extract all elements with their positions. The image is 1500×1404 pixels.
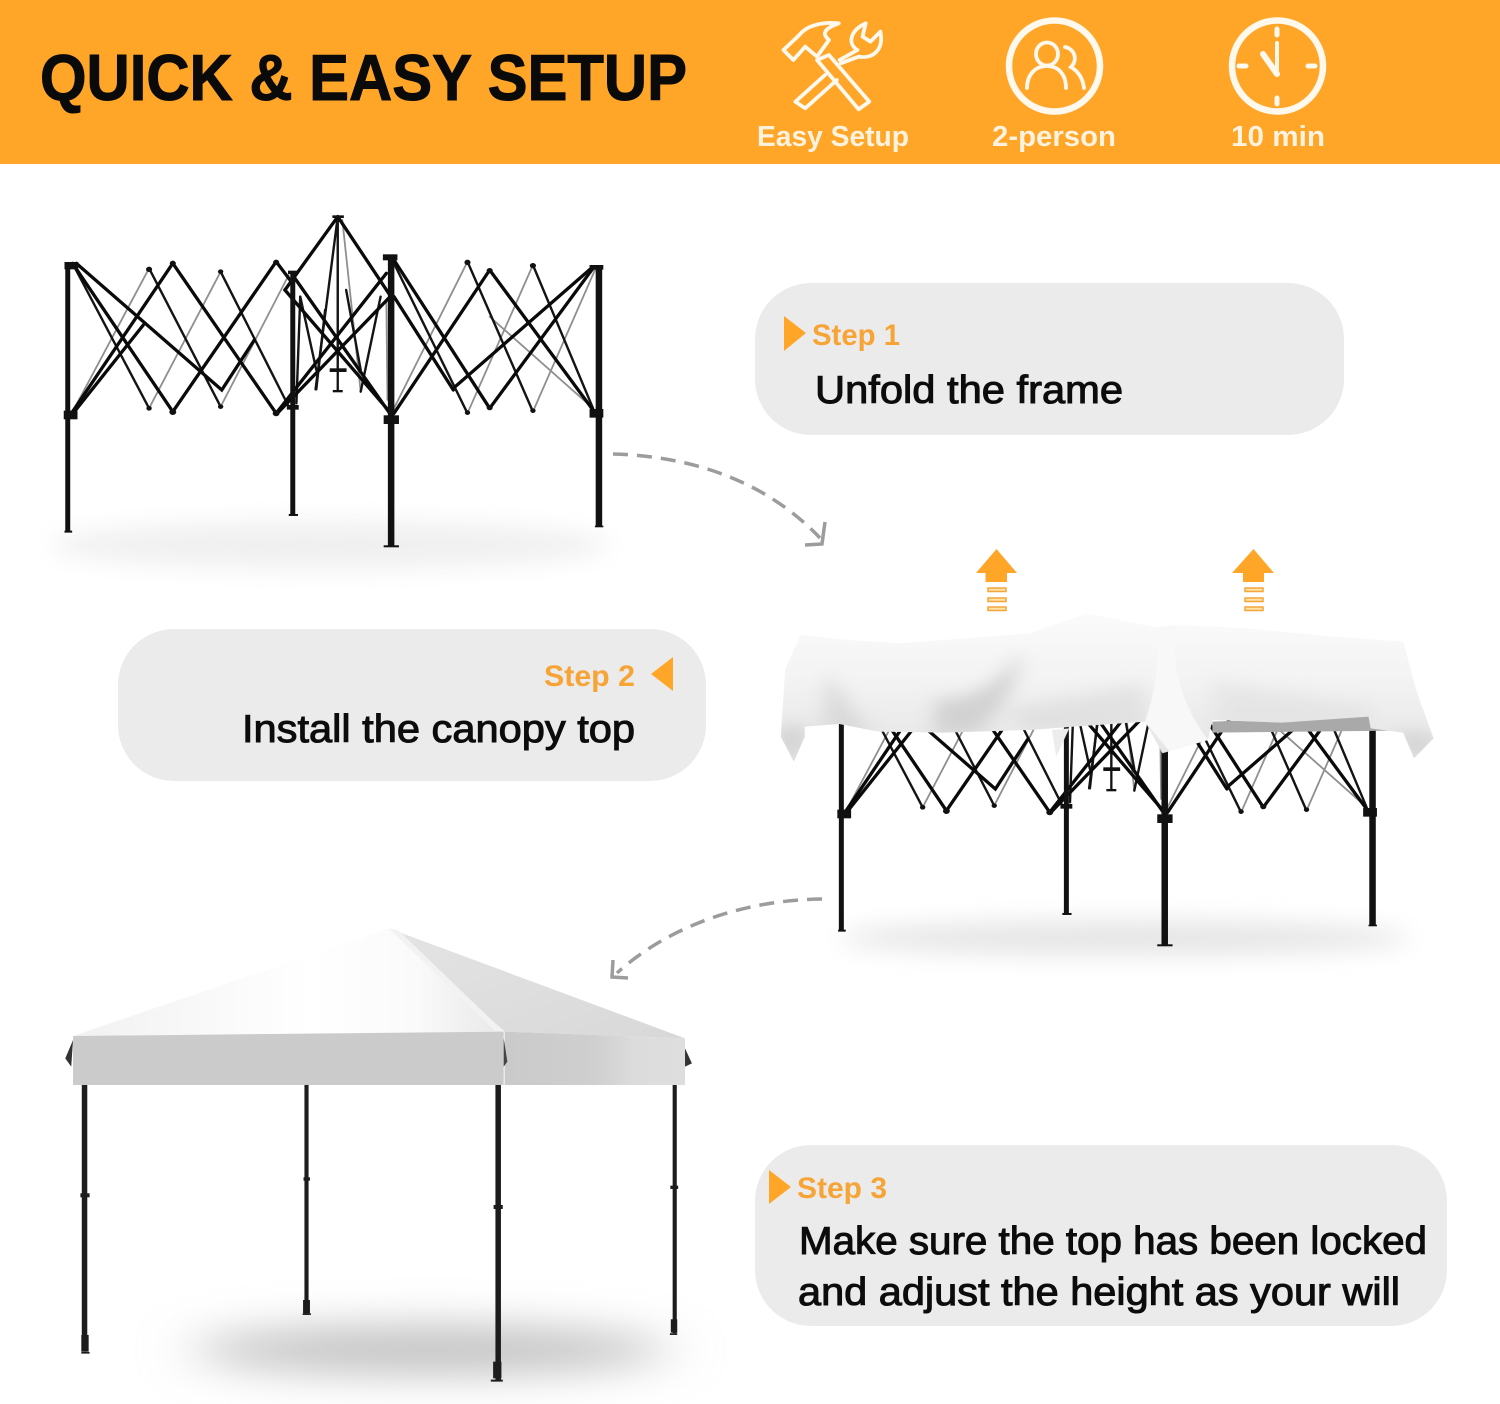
canopy legs (80, 1085, 678, 1382)
icon: up arrow left (976, 549, 1017, 610)
label: 10 min: 10 min (1231, 121, 1325, 153)
step 3 text: Make sure the top has been locked (799, 1220, 1427, 1263)
icon: clock (1232, 20, 1323, 112)
arrow: step 2 to step 3 (612, 899, 822, 978)
step 3 marker (769, 1170, 791, 1204)
icon: two people (1009, 20, 1100, 112)
step 3 text: and adjust the height as your will (798, 1271, 1400, 1314)
panel: step 3 (755, 1145, 1447, 1326)
step 1 text: Unfold the frame (815, 369, 1123, 412)
title: QUICK & EASY SETUP (40, 41, 687, 114)
label: 2-person: 2-person (992, 121, 1116, 153)
label: easy setup: Easy Setup (757, 121, 909, 153)
step 2 text: Install the canopy top (242, 708, 635, 751)
step 3 label: Step 3 (797, 1172, 887, 1205)
step 1 label: Step 1 (812, 319, 900, 352)
canopy roof (65, 928, 692, 1085)
icon: up arrow right (1232, 549, 1274, 610)
panel: step 2 (118, 629, 706, 781)
unfolded frame illustration (64, 215, 603, 547)
icon: hammer and wrench (783, 23, 881, 109)
step 2 marker (651, 657, 673, 691)
step 1 marker (784, 316, 806, 351)
ground shadow (192, 1325, 669, 1375)
assembled canopy illustration (65, 928, 692, 1382)
frame shadow (50, 521, 610, 569)
header banner (0, 0, 1500, 164)
draped canopy (780, 639, 1434, 762)
frame with canopy illustration (779, 613, 1438, 956)
arrow: step 1 to step 2 (613, 454, 825, 545)
step 2 label: Step 2 (544, 660, 635, 693)
panel: step 1 (755, 283, 1344, 435)
